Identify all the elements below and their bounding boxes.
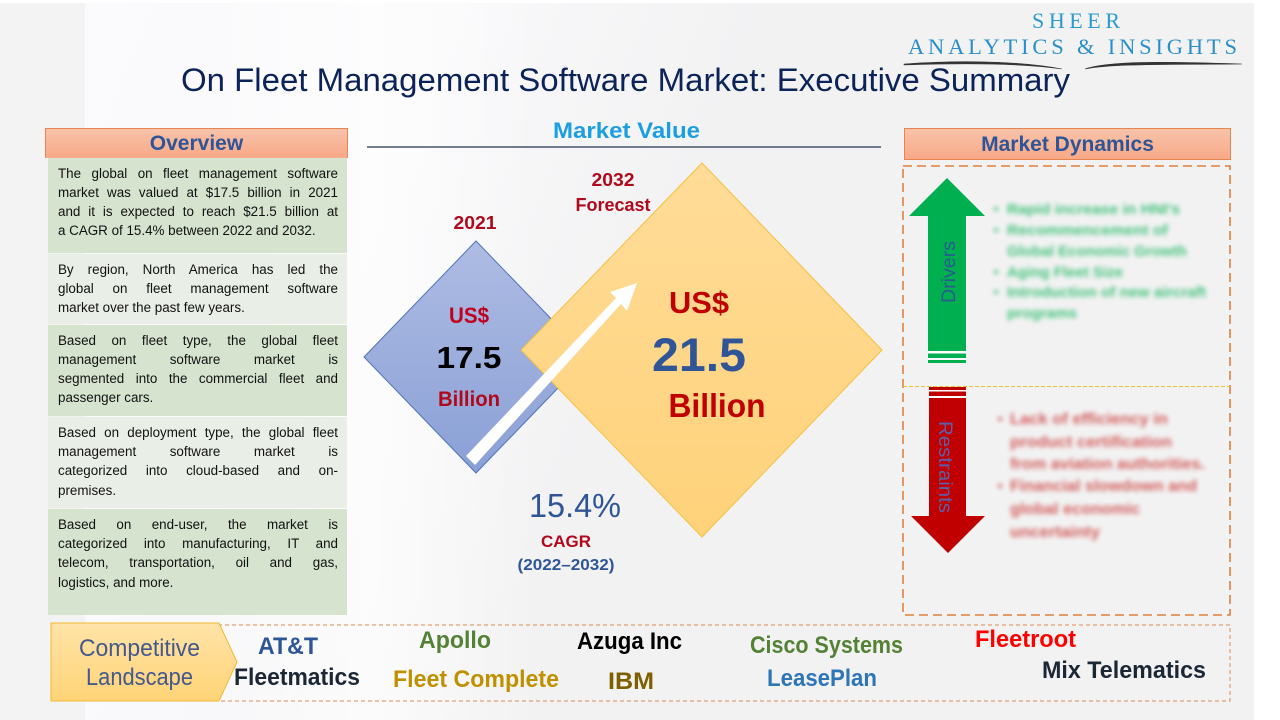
value: 21.5 billion: 21.5 xyxy=(652,328,746,381)
value: 17.5 billion: US$ xyxy=(449,303,489,328)
label: competitive landscape: Landscape xyxy=(86,664,193,691)
text block: end-user xyxy=(48,509,347,615)
list: drivers (blurred): programs xyxy=(1007,305,1077,322)
text block: region xyxy=(48,254,347,324)
heading: overview xyxy=(45,128,348,158)
list: restraints (blurred): global economic xyxy=(1010,501,1140,518)
value: 17.5 billion: 17.5 xyxy=(436,340,502,375)
heading: market dynamics xyxy=(904,128,1231,160)
value: 21.5 billion: Billion xyxy=(668,387,766,424)
list: drivers (blurred): Introduction of new aircraft xyxy=(1007,284,1206,301)
text block: deployment type: Based on deployment type, the global fleet xyxy=(58,425,338,440)
text block: fleet type: passenger cars. xyxy=(58,390,153,405)
company names: AT&T xyxy=(258,633,318,660)
text block: end-user: logistics, and more. xyxy=(58,575,173,590)
label: 2032 forecast: Forecast xyxy=(576,195,650,215)
company names: Cisco Systems xyxy=(750,632,903,659)
text block: end-user: Based on end-user, the market is xyxy=(58,517,338,532)
arrow: growth xyxy=(466,283,637,465)
arrow: restraints: Restraints xyxy=(934,421,955,513)
heading: market dynamics: Market Dynamics xyxy=(981,133,1154,156)
company names: LeasePlan xyxy=(767,665,877,692)
text block: deployment type: premises. xyxy=(58,483,116,498)
logo: Sheer Analytics & Insights: ANALYTICS & INSIGHTS xyxy=(908,34,1237,59)
text block: market value summary: a CAGR of 15.4% between 2022 and 2032. xyxy=(58,223,316,238)
text block: fleet type: Based on fleet type, the global fleet xyxy=(58,333,338,348)
text block: fleet type: segmented into the commercial fleet and xyxy=(58,371,338,386)
text block: region: market over the past few years. xyxy=(58,300,245,315)
diamond: 2032 forecast value xyxy=(521,163,882,537)
panel: overview xyxy=(45,128,348,615)
text block: deployment type xyxy=(48,417,347,508)
label: 2021: 2021 xyxy=(454,213,496,233)
company names xyxy=(234,626,1206,695)
list: restraints (blurred): Lack of efficiency in xyxy=(1010,411,1168,428)
company names: Azuga Inc xyxy=(577,628,682,655)
arrow: restraints xyxy=(911,387,985,553)
text block: market value summary: and it is expected to reach $21.5 billion at xyxy=(58,204,338,219)
company names: Fleet Complete xyxy=(393,666,559,693)
value: CAGR: CAGR xyxy=(541,532,591,551)
panel: market dynamics xyxy=(902,128,1231,616)
company names: Apollo xyxy=(419,627,491,654)
label: competitive landscape: Competitive xyxy=(79,635,200,662)
value: 21.5 billion xyxy=(652,285,766,424)
company names: IBM xyxy=(608,668,654,695)
diamond: 2021 value xyxy=(364,241,588,473)
arrow: drivers: Drivers xyxy=(939,241,960,303)
list: restraints (blurred): uncertainty xyxy=(1010,524,1100,541)
list: drivers (blurred): Aging Fleet Size xyxy=(1007,264,1123,281)
text block: market value summary xyxy=(48,158,347,253)
text block: market value summary: The global on fleet management software xyxy=(58,166,338,181)
text block: fleet type: management software market is xyxy=(58,352,338,367)
heading: market value: Market Value xyxy=(553,118,700,143)
value: CAGR xyxy=(518,487,621,574)
company names: Mix Telematics xyxy=(1042,657,1206,684)
label: 2032 forecast xyxy=(576,170,650,215)
value: 21.5 billion: US$ xyxy=(669,285,729,320)
label: 2032 forecast: 2032 xyxy=(592,170,634,190)
value: 17.5 billion: Billion xyxy=(438,388,500,411)
heading: overview: Overview xyxy=(150,132,243,155)
text block: deployment type: management software market is xyxy=(58,444,338,459)
value: 17.5 billion xyxy=(436,303,502,411)
text block: market value summary: market was valued at $17.5 billion in 2021 xyxy=(58,185,338,200)
arrow: drivers xyxy=(909,178,985,363)
company names: Fleetmatics xyxy=(234,664,360,691)
text block: region: global on fleet management software xyxy=(58,281,338,296)
text block: deployment type: categorized into cloud-based and on- xyxy=(58,463,338,478)
list: restraints (blurred) xyxy=(998,411,1205,541)
value: CAGR: 15.4% xyxy=(529,487,621,524)
list: drivers (blurred): Global Economic Growth xyxy=(1007,243,1187,260)
logo: Sheer Analytics & Insights: SHEER xyxy=(1032,8,1120,33)
text block: end-user: categorized into manufacturing, IT and xyxy=(58,536,338,551)
text block: end-user: telecom, transportation, oil and gas, xyxy=(58,555,338,570)
company names: Fleetroot xyxy=(975,626,1076,653)
label: competitive landscape xyxy=(51,623,237,701)
list: drivers (blurred): Recommencement of xyxy=(1007,222,1169,239)
list: drivers (blurred): Rapid increase in HNI's xyxy=(1007,201,1180,218)
value: CAGR: (2022–2032) xyxy=(518,557,614,574)
text block: region: By region, North America has led the xyxy=(58,262,338,277)
list: restraints (blurred): from aviation authorities. xyxy=(1010,456,1205,473)
text block: fleet type xyxy=(48,325,347,416)
list: restraints (blurred): Financial slowdown and xyxy=(1010,478,1197,495)
title: On Fleet Management Software Market: Executive Summary xyxy=(181,62,1070,98)
list: restraints (blurred): product certification xyxy=(1010,434,1172,451)
list: drivers (blurred) xyxy=(994,201,1206,322)
